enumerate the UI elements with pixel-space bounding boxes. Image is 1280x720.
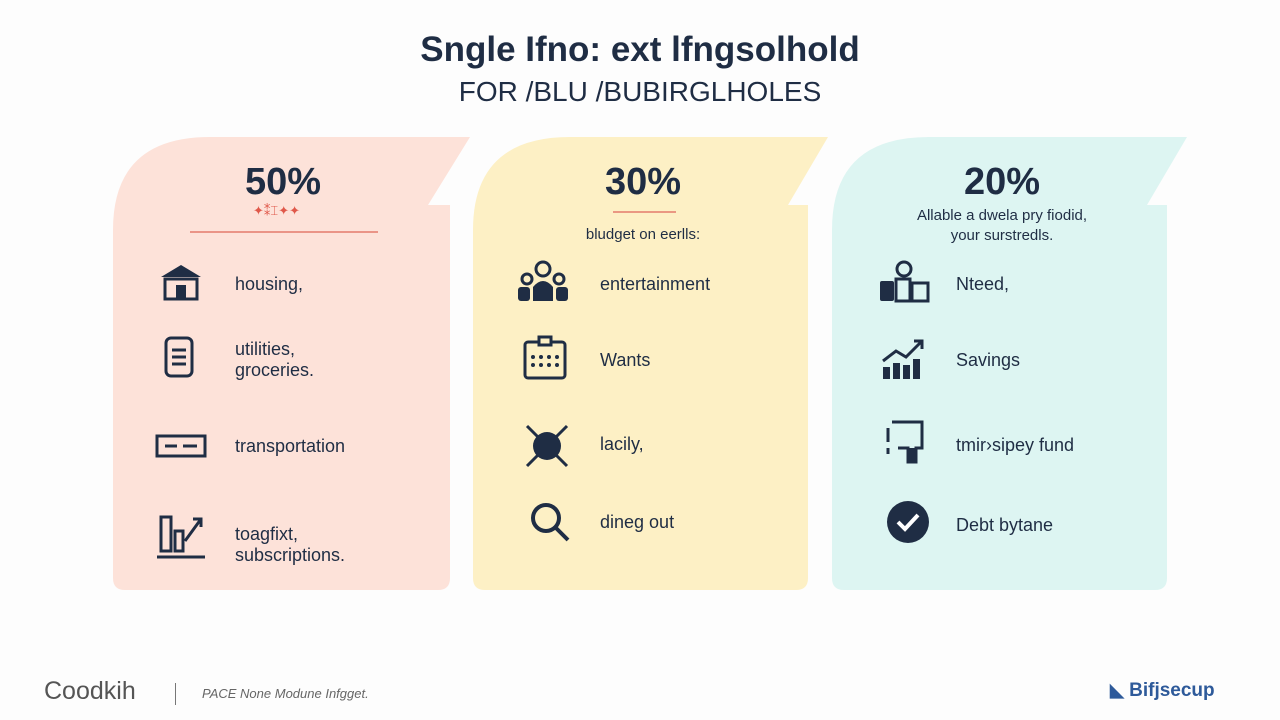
panel: needs 50%: [156, 161, 345, 565]
panel: wants 30%: entertainment: [600, 274, 710, 294]
sparkle marks: ✦⁑⌶✦✦: [253, 203, 300, 218]
icon: search: [531, 503, 570, 542]
title: Sngle Ifno: ext lfngsolhold: [420, 30, 860, 69]
panel: wants 30%: dineg out: [600, 512, 674, 532]
title: [420, 30, 860, 107]
icon: bottle: [526, 425, 568, 467]
panel: savings 20%: Savings: [956, 350, 1020, 370]
icon: check: [887, 501, 929, 543]
percentage 50: 50%: [245, 161, 321, 203]
panel: savings 20%: tmir›sipey fund: [956, 435, 1074, 455]
footer divider and tagline: [175, 683, 369, 705]
icon: emergency: [886, 420, 924, 464]
icon: house: [161, 265, 201, 300]
caption: Allable a dwela pry fiodid,: [917, 207, 1087, 224]
panel: wants 30%: [518, 161, 710, 542]
caption: your surstredls.: [951, 227, 1053, 244]
footer logo: ◣ Bifjsecup: [1110, 680, 1215, 701]
percentage 20: 20%: [964, 161, 1040, 203]
icon: transportation: [156, 434, 206, 458]
panel: savings 20%: Nteed,: [956, 274, 1009, 294]
caption: [917, 207, 1087, 244]
panel: needs 50%: toagfixt,: [235, 524, 298, 544]
panel: wants 30%: Wants: [600, 350, 650, 370]
title: FOR /BLU /BUBIRGLHOLES: [459, 76, 821, 107]
percentage 30: 30%: [605, 161, 681, 203]
panel: needs 50%: utilities,: [235, 339, 295, 359]
footer brand: Coodkih: [44, 677, 136, 705]
icon: calendar: [524, 336, 566, 380]
panel: needs 50%: transportation: [235, 436, 345, 456]
icon: chart: [157, 516, 205, 558]
panel: needs 50%: subscriptions.: [235, 545, 345, 565]
panel: needs 50%: housing,: [235, 274, 303, 294]
icon: growth: [882, 340, 924, 379]
icon: utilities: [164, 336, 194, 378]
panel: needs 50%: groceries.: [235, 360, 314, 380]
icon: people: [518, 260, 568, 301]
caption: bludget on eerlls:: [586, 226, 700, 243]
icon: people box: [880, 260, 930, 302]
panel: savings 20%: [880, 161, 1087, 543]
panel: wants 30%: lacily,: [600, 434, 644, 454]
footer divider and tagline: PACE None Modune Infgget.: [202, 686, 369, 701]
panel: savings 20%: Debt bytane: [956, 515, 1053, 535]
